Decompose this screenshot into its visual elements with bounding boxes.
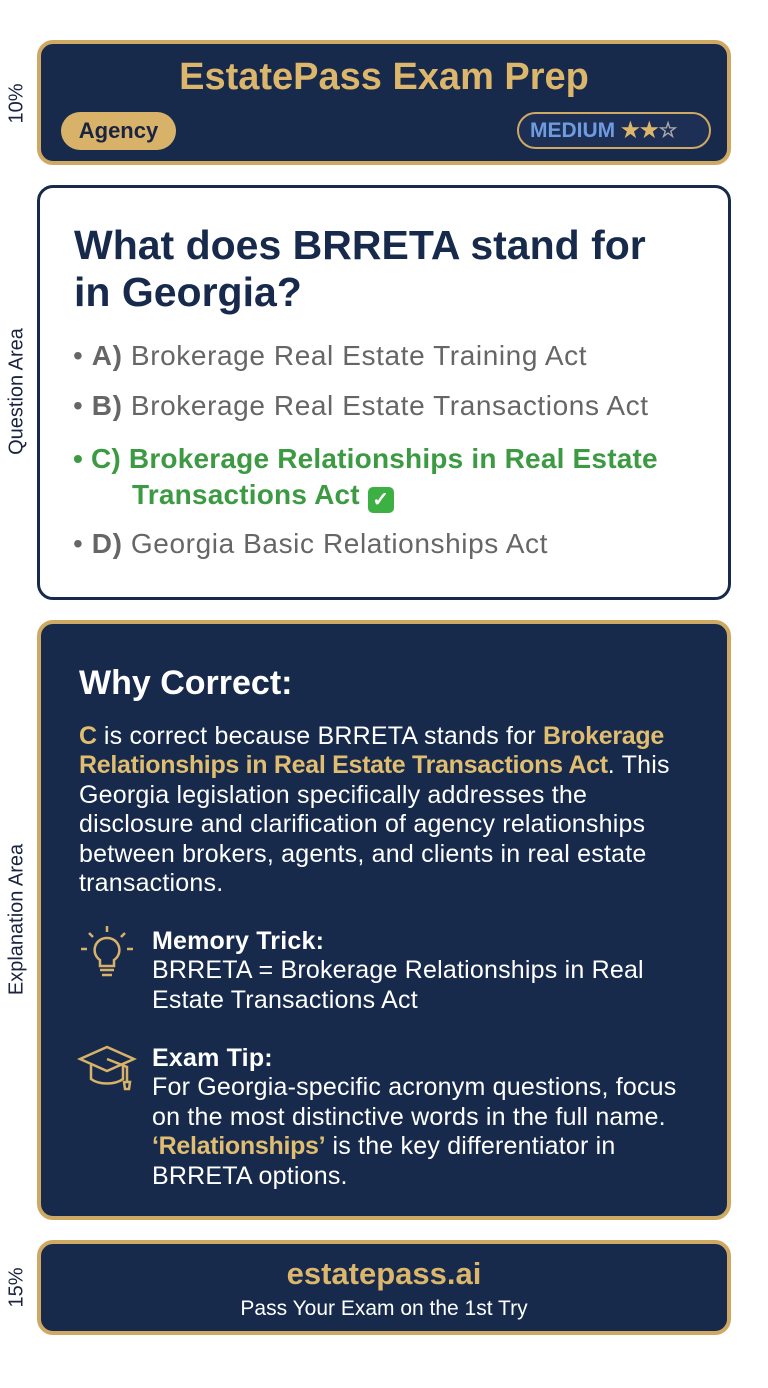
question heading [74, 222, 646, 315]
footer brand: estatepass.ai [287, 1256, 481, 1291]
explanation panel [37, 620, 731, 1220]
side label: Question Area: Question Area [6, 328, 28, 455]
option D: • D) Georgia Basic Relationships Act [73, 528, 548, 559]
side label: Explanation Area: Explanation Area [6, 844, 28, 995]
heading: Why Correct: Why Correct: [79, 664, 292, 702]
memory trick: Memory Trick: [152, 927, 324, 955]
option C correct: • C) Brokerage Relationships in Real Estate [73, 443, 658, 474]
exam tip: Exam Tip: [152, 1044, 273, 1072]
memory trick [152, 927, 644, 1014]
icon: graduation cap [77, 1046, 137, 1090]
option B: • B) Brokerage Real Estate Transactions Act [73, 390, 649, 421]
badge: difficulty [517, 112, 711, 149]
memory trick: BRRETA = Brokerage Relationships in Real Estate Transactions Act [152, 956, 644, 1014]
option A: • A) Brokerage Real Estate Training Act [73, 340, 587, 371]
badge: difficulty: MEDIUM ★★☆ [530, 119, 677, 142]
header panel [37, 40, 731, 165]
option C correct: ✓ [372, 489, 389, 511]
badge: Agency: Agency [79, 118, 158, 143]
side label: 10%: 10% [6, 83, 28, 124]
question panel [37, 185, 731, 600]
side label: 15%: 15% [6, 1267, 28, 1308]
exam tip: For Georgia-specific acronym questions, focus on the most distinctive words in the full name. ‘Relationships’ is the key differentiator in BRRETA options. [152, 1073, 676, 1190]
badge: Agency [61, 112, 176, 150]
question heading: What does BRRETA stand for [74, 222, 646, 268]
footer tagline: Pass Your Exam on the 1st Try [240, 1297, 528, 1320]
explanation text: C is correct because BRRETA stands for Brokerage Relationships in Real Estate Transactions Act. This Georgia legislation specifically addresses the disclosure and clarification of agency relationships between brokers, agents, and clients in real estate transactions. [79, 722, 670, 897]
option C correct: Transactions Act [132, 479, 360, 510]
option C correct [73, 443, 658, 513]
icon: lightbulb [81, 926, 133, 976]
question heading: in Georgia? [74, 269, 302, 315]
title: EstatePass Exam Prep [179, 56, 589, 98]
footer panel [37, 1240, 731, 1335]
